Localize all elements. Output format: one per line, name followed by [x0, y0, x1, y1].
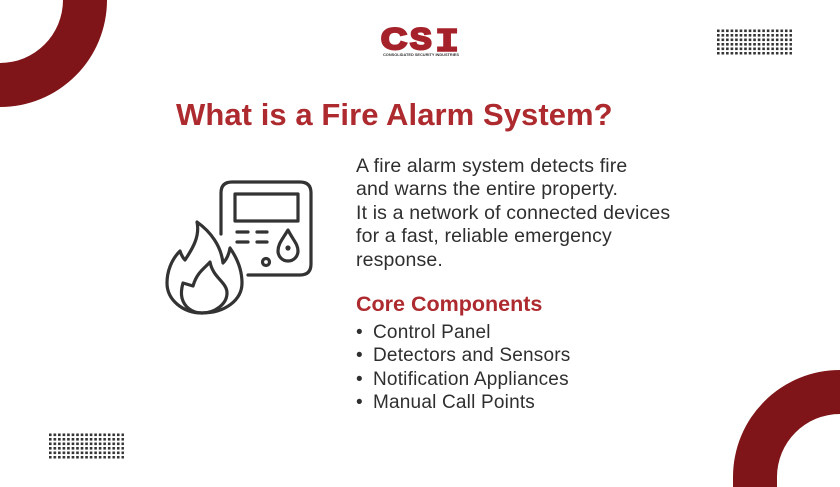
decorative ring: bottom right [733, 370, 840, 487]
description: It is a network of connected devices [356, 202, 670, 224]
logo wordmark: I [435, 24, 459, 61]
description [356, 154, 670, 271]
dot grid: bottom left [49, 434, 124, 458]
description: and warns the entire property. [356, 178, 618, 200]
logo wordmark [381, 22, 459, 61]
logo wordmark: S [410, 22, 432, 56]
item: manual call points: • [356, 392, 363, 413]
outer flame [167, 222, 242, 313]
inner flame [181, 262, 227, 313]
component list [356, 322, 570, 413]
item: notification appliances: • [356, 369, 363, 390]
small knob [262, 258, 270, 266]
description: for a fast, reliable emergency [356, 225, 612, 247]
description: A fire alarm system detects fire [356, 154, 627, 176]
dot grid: top right [717, 30, 792, 54]
title: What is a Fire Alarm System? [176, 97, 613, 132]
subheading: core components: Core Components [356, 292, 542, 316]
logo [381, 22, 459, 61]
panel buttons [237, 232, 267, 242]
item: control panel: Control Panel [373, 322, 491, 343]
panel outline [221, 182, 311, 275]
item: manual call points: Manual Call Points [373, 392, 535, 413]
logo tagline: CONSOLIDATED SECURITY INDUSTRIES [383, 52, 459, 57]
logo wordmark: C [381, 22, 407, 56]
item: notification appliances: Notification Appliances [373, 369, 569, 390]
decorative ring: top left [0, 0, 107, 107]
item: control panel: • [356, 322, 363, 343]
icon: control panel with flame [165, 180, 313, 315]
item: detectors and sensors: • [356, 345, 363, 366]
panel screen [235, 194, 298, 221]
description: response. [356, 249, 443, 271]
item: detectors and sensors: Detectors and Sensors [373, 345, 570, 366]
droplet [278, 230, 298, 261]
